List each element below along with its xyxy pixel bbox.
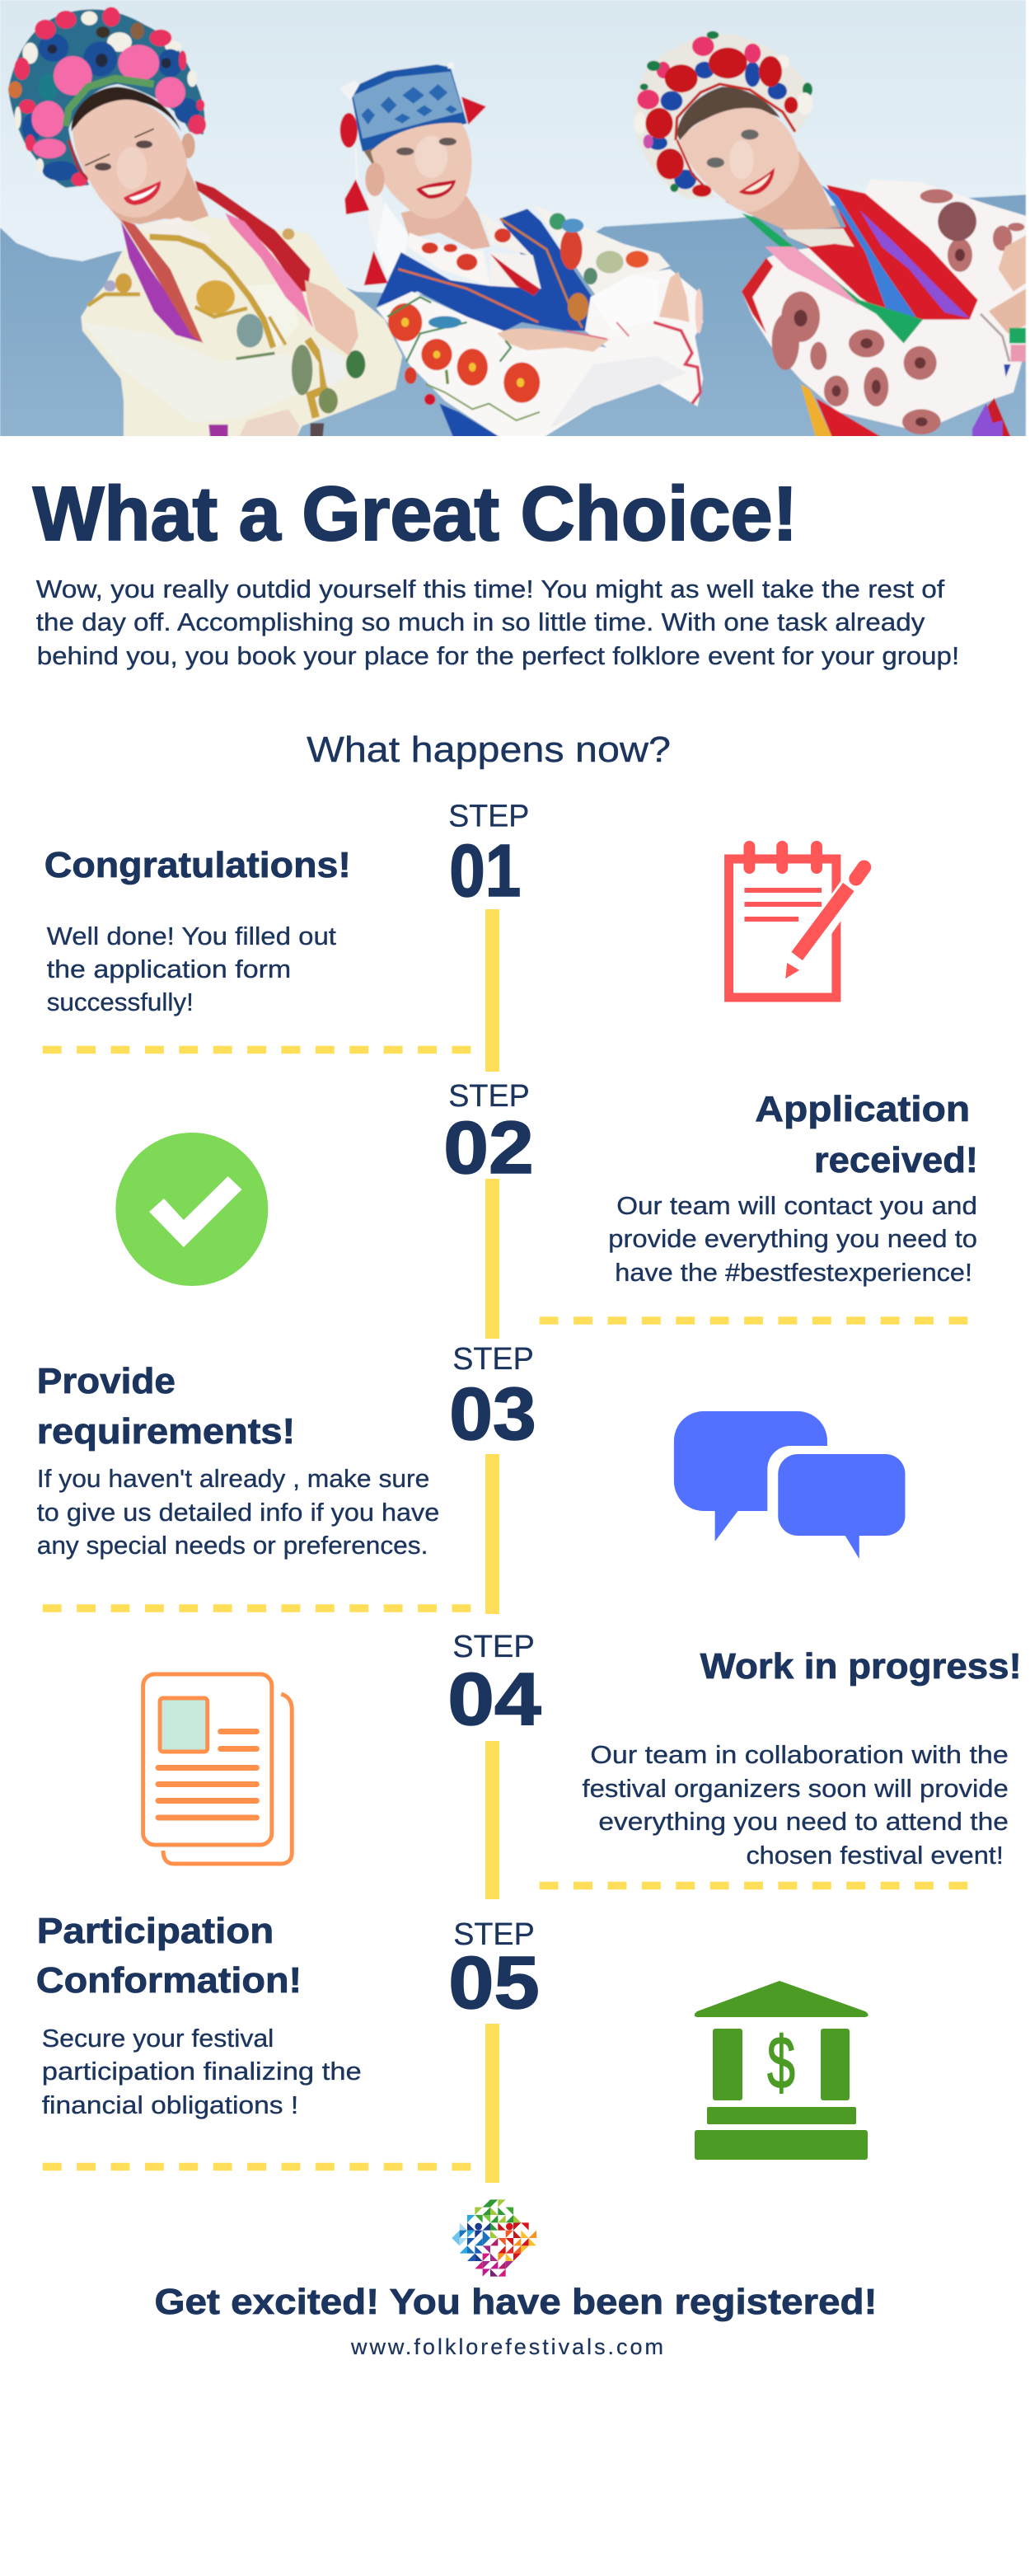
step 03 heading bbox=[37, 1361, 295, 1452]
closing headline: Get excited! You have been registered! bbox=[155, 2282, 877, 2322]
step 05 label: STEP bbox=[453, 1917, 535, 1952]
step 02 text bbox=[608, 1192, 977, 1287]
step 03 label: 03 bbox=[449, 1373, 536, 1456]
step 03 heading: requirements! bbox=[37, 1411, 295, 1452]
step 05 heading bbox=[36, 1911, 302, 2001]
dancer 2: blue hat and vest bbox=[339, 62, 703, 437]
step 04 label bbox=[447, 1630, 541, 1741]
step 01 heading: Congratulations! bbox=[44, 845, 351, 885]
step 03 heading: Provide bbox=[37, 1361, 176, 1401]
step 02 label: 02 bbox=[443, 1107, 534, 1189]
step 02 label bbox=[443, 1079, 534, 1189]
step 01 label: STEP bbox=[448, 799, 529, 834]
step 05 label bbox=[448, 1917, 540, 2025]
step 02 text: have the #bestfestexperience! bbox=[615, 1259, 972, 1287]
step 05 heading: Conformation! bbox=[36, 1960, 302, 2001]
icon: bank with dollar sign bbox=[695, 1981, 868, 2160]
icon: green check mark bbox=[115, 1133, 268, 1286]
main content: headings and five steps bbox=[33, 471, 1022, 2183]
step 03 text bbox=[37, 1465, 439, 1560]
step 03 text: If you haven't already , make sure bbox=[37, 1465, 429, 1493]
step 05 text: participation finalizing the bbox=[42, 2058, 362, 2086]
panel: step 05 bbox=[36, 1911, 868, 2183]
step 05 text bbox=[42, 2025, 362, 2119]
dancer 1: flower crown and cream blouse bbox=[8, 7, 402, 437]
step 05 heading: Participation bbox=[37, 1911, 274, 1951]
panel: step 01 bbox=[43, 799, 871, 1072]
step 02 heading bbox=[755, 1089, 978, 1180]
step 02 text: provide everything you need to bbox=[608, 1225, 977, 1253]
intro paragraph: Wow, you really outdid yourself this time! You might as well take the rest of bbox=[36, 575, 945, 603]
intro paragraph: behind you, you book your place for the perfect folklore event for your group! bbox=[37, 642, 959, 670]
step 02 heading: received! bbox=[814, 1140, 978, 1180]
panel: step 02 bbox=[115, 1079, 978, 1339]
intro paragraph bbox=[36, 575, 959, 670]
icon: folklore festivals logo bbox=[452, 2199, 536, 2277]
section heading: What happens now? bbox=[307, 730, 671, 770]
step 03 label bbox=[449, 1342, 536, 1456]
icon: bank with dollar sign: $ bbox=[767, 2022, 795, 2104]
step 04 text: everything you need to attend the bbox=[598, 1808, 1009, 1836]
step 01 text: Well done! You filled out bbox=[47, 922, 337, 950]
step 01 text: successfully! bbox=[47, 988, 194, 1016]
step 04 text: Our team in collaboration with the bbox=[590, 1741, 1009, 1769]
panel: step 04 bbox=[143, 1630, 1022, 1899]
step 04 text: festival organizers soon will provide bbox=[582, 1775, 1009, 1803]
website address: www.folklorefestivals.com bbox=[350, 2334, 663, 2359]
step 02 heading: Application bbox=[755, 1089, 970, 1129]
step 04 label: 04 bbox=[447, 1659, 541, 1741]
step 05 text: financial obligations ! bbox=[42, 2091, 298, 2119]
step 01 text: the application form bbox=[47, 955, 291, 983]
step 04 label: STEP bbox=[452, 1630, 535, 1664]
step 03 text: to give us detailed info if you have bbox=[37, 1499, 439, 1527]
step 04 text bbox=[582, 1741, 1009, 1870]
icon: chat bubbles bbox=[674, 1411, 915, 1559]
step 05 text: Secure your festival bbox=[42, 2025, 274, 2053]
intro paragraph: the day off. Accomplishing so much in so little time. With one task already bbox=[36, 608, 925, 636]
step 03 label: STEP bbox=[452, 1342, 534, 1377]
title: What a Great Choice! bbox=[33, 471, 798, 556]
step 05 label: 05 bbox=[448, 1942, 540, 2025]
step 04 text: chosen festival event! bbox=[746, 1842, 1004, 1870]
step 02 text: Our team will contact you and bbox=[616, 1192, 977, 1220]
panel: step 03 bbox=[37, 1342, 915, 1614]
hero photo: three dancers in folk costume bbox=[0, 0, 1030, 437]
step 03 text: any special needs or preferences. bbox=[37, 1532, 428, 1560]
step 04 heading: Work in progress! bbox=[700, 1646, 1022, 1687]
step 02 label: STEP bbox=[448, 1079, 530, 1114]
icon: notepad and pencil bbox=[729, 841, 871, 997]
step 01 label: 01 bbox=[449, 830, 521, 913]
step 01 text bbox=[47, 922, 337, 1016]
icon: documents bbox=[143, 1674, 292, 1864]
dancer 3: red poppy crown and embroidered blouse bbox=[634, 31, 1026, 437]
